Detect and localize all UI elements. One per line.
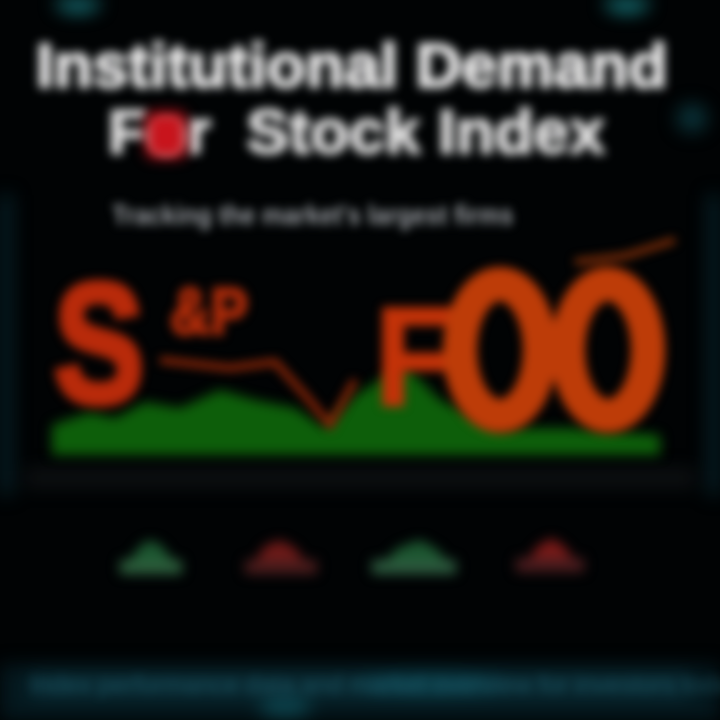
title: For Stock Index — [108, 98, 605, 167]
stat row — [114, 532, 590, 582]
title — [31, 32, 672, 167]
stat item 1 — [120, 540, 182, 574]
chart: S&P 500 with green area — [44, 232, 680, 462]
title: Institutional Demand — [36, 32, 668, 101]
large index label: S — [54, 249, 144, 439]
large index label — [48, 232, 680, 440]
subtitle: Tracking the market's largest firms — [112, 200, 513, 230]
large index label: F — [375, 278, 455, 435]
stat item 2 — [245, 540, 317, 574]
large index label: &P — [170, 274, 248, 348]
stat item 4 — [516, 538, 584, 572]
stat item 3 — [372, 540, 456, 574]
green area chart — [44, 368, 667, 462]
icon: red accent in title — [146, 112, 186, 158]
